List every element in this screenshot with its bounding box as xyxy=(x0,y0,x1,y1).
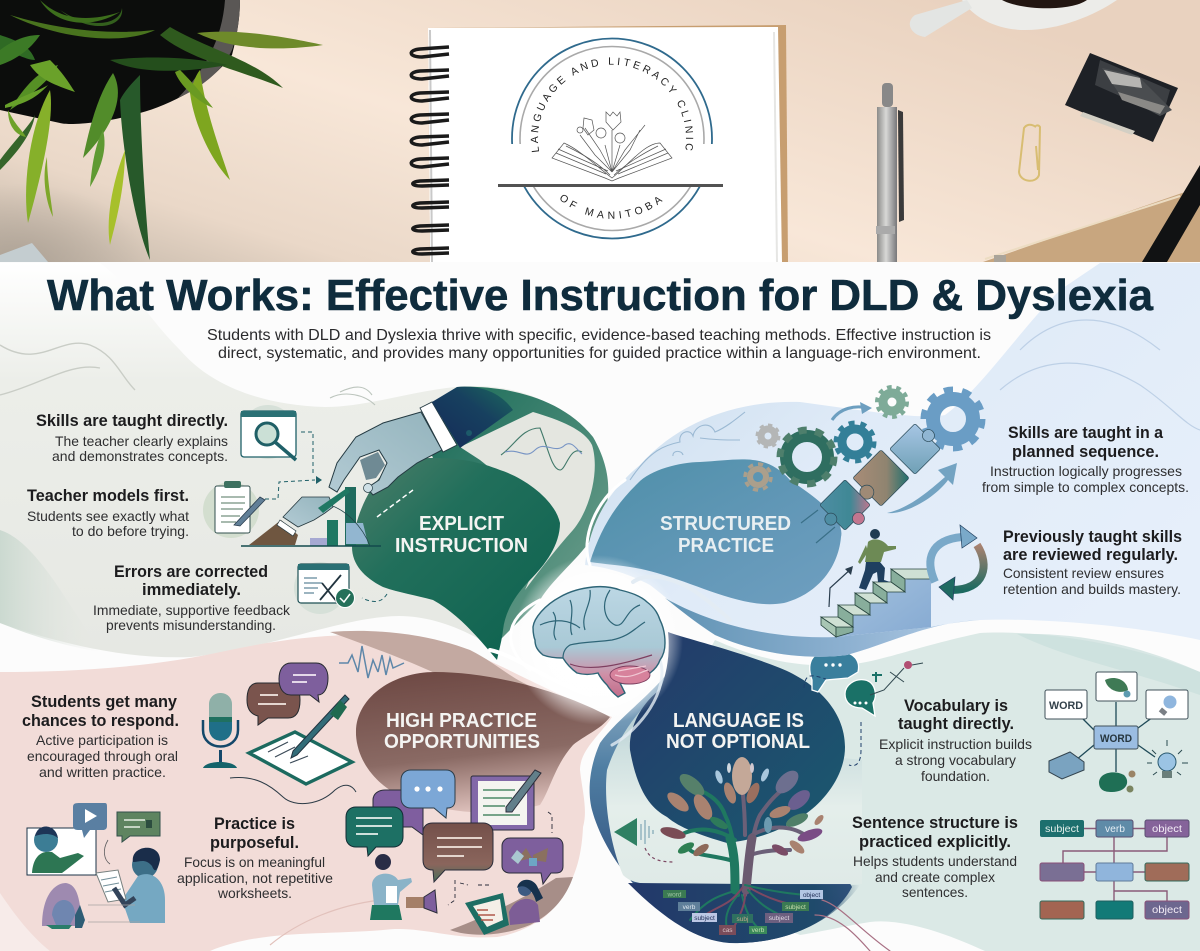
text: skills are taught directly: Skills are taught directly. xyxy=(36,411,228,430)
heading: language is not optional: NOT OPTIONAL xyxy=(666,731,810,753)
panel: structured practice xyxy=(585,263,1200,657)
chart: sentence diagram: subject xyxy=(1045,824,1079,835)
labels: word roots: verb xyxy=(683,904,696,911)
intro paragraph xyxy=(207,327,991,362)
icon: folder corner xyxy=(983,190,1200,262)
panel: explicit instruction xyxy=(0,263,608,660)
text: sentence structure: Sentence structure is xyxy=(852,813,1018,832)
text: students get many chances: encouraged through oral xyxy=(27,748,178,764)
text: vocabulary is taught directly xyxy=(879,696,1032,784)
text: previously taught skills: Consistent review ensures xyxy=(1003,565,1164,581)
labels: word roots: object xyxy=(803,892,820,899)
notebook xyxy=(411,25,788,262)
text: students get many chances: and written practice. xyxy=(39,764,166,780)
text: sentence structure: and create complex xyxy=(875,869,995,885)
icon: coffee mug xyxy=(910,0,1117,37)
text: teacher models first: Students see exactly what xyxy=(27,508,189,524)
illustration: speech bubbles and teacher xyxy=(346,770,563,935)
intro paragraph: Students with DLD and Dyslexia thrive with specific, evidence-based teaching methods. Effective instruction is xyxy=(207,327,991,344)
text: skills taught in a planned sequence: planned sequence. xyxy=(1012,442,1159,461)
text: vocabulary is taught directly: foundation. xyxy=(921,768,990,784)
labels: word roots: subject xyxy=(769,915,789,922)
text: skills are taught directly: and demonstrates concepts. xyxy=(52,448,228,464)
text: vocabulary is taught directly: Vocabulary is xyxy=(904,696,1008,715)
chart: sentence diagram: object xyxy=(1152,824,1182,835)
icon: microphone xyxy=(203,693,238,768)
text: previously taught skills xyxy=(1003,527,1182,597)
photo header: desk scene xyxy=(0,0,1200,262)
title: What Works: Effective Instruction for DLD & Dyslexia xyxy=(47,271,1154,320)
icon: word map: WORD xyxy=(1100,733,1132,745)
labels: word roots: subj xyxy=(737,916,748,923)
text: students get many chances: Active participation is xyxy=(36,732,168,748)
text: students get many chances: chances to respond. xyxy=(22,711,179,730)
text: practice is purposeful xyxy=(177,814,333,901)
heading: language is not optional xyxy=(666,710,810,753)
intro paragraph: direct, systematic, and provides many opportunities for guided practice within a language-rich environment. xyxy=(218,345,981,362)
text: teacher models first: Teacher models first. xyxy=(27,486,189,505)
heading: structured practice: STRUCTURED xyxy=(660,513,791,535)
icon: speaker xyxy=(614,818,675,862)
text: vocabulary is taught directly: a strong vocabulary xyxy=(895,752,1016,768)
text: previously taught skills: retention and builds mastery. xyxy=(1003,581,1181,597)
icon: paperclip xyxy=(1019,125,1040,181)
labels: word roots: subject xyxy=(694,915,715,922)
text: vocabulary is taught directly: Explicit instruction builds xyxy=(879,736,1032,752)
logo: Language and Literacy Clinic of Manitoba xyxy=(498,38,723,240)
icon: error correction window xyxy=(294,562,387,614)
labels: word roots xyxy=(663,890,823,935)
icon: magnifier window xyxy=(241,405,313,475)
text: teacher models first xyxy=(27,486,189,539)
chart: sentence diagram: object xyxy=(1152,905,1182,916)
notebook corner xyxy=(0,243,48,262)
heading: high practice opportunities: HIGH PRACTICE xyxy=(386,710,537,732)
text: previously taught skills: are reviewed regularly. xyxy=(1003,545,1178,564)
text: skills taught in a planned sequence: Skills are taught in a xyxy=(1008,423,1164,442)
illustration: tree with word roots xyxy=(659,757,890,951)
text: errors are corrected immediately: Immediate, supportive feedback xyxy=(93,602,291,618)
text: errors are corrected immediately: Errors are corrected xyxy=(114,562,268,581)
text: skills taught in a planned sequence xyxy=(982,423,1189,495)
text: errors are corrected immediately: immediately. xyxy=(142,580,241,599)
text: errors are corrected immediately: prevents misunderstanding. xyxy=(106,617,276,633)
icon: black pen xyxy=(1142,165,1200,262)
spiral binding xyxy=(411,47,449,254)
text: vocabulary is taught directly: taught directly. xyxy=(898,714,1014,733)
icon: review cycle arrows xyxy=(930,525,984,600)
icon: word map: WORD xyxy=(1049,700,1083,712)
icon: sound wave xyxy=(339,646,404,678)
heading: structured practice: PRACTICE xyxy=(678,535,774,557)
icon: gears xyxy=(745,387,982,490)
text: students get many chances: Students get many xyxy=(31,692,178,711)
icon: potted plant xyxy=(0,0,323,260)
icon: chat bubbles xyxy=(804,650,923,766)
icon: brain xyxy=(533,587,665,697)
heading: explicit instruction xyxy=(395,513,528,557)
illustration: hands teaching xyxy=(241,387,513,546)
heading: high practice opportunities xyxy=(384,710,540,753)
heading: high practice opportunities: OPPORTUNITIES xyxy=(384,731,540,753)
text: skills are taught directly: The teacher clearly explains xyxy=(55,433,228,449)
icon: binder clip xyxy=(1065,53,1178,142)
chart: sentence diagram: verb xyxy=(1105,824,1125,835)
heading: structured practice xyxy=(660,513,791,557)
text: practice is purposeful: application, not repetitive xyxy=(177,870,333,886)
text: sentence structure: sentences. xyxy=(902,884,968,900)
icon: speech bubbles and notepad xyxy=(230,663,356,804)
text: previously taught skills: Previously taught skills xyxy=(1003,527,1182,546)
labels: word roots: subject xyxy=(785,904,806,911)
logo: Language and Literacy Clinic of Manitoba: OF MANITOBA xyxy=(560,194,662,219)
text: skills taught in a planned sequence: Instruction logically progresses xyxy=(990,463,1182,479)
icon: word map xyxy=(1045,672,1188,792)
text: skills taught in a planned sequence: from simple to complex concepts. xyxy=(982,479,1189,495)
heading: explicit instruction: INSTRUCTION xyxy=(395,535,528,557)
panel: language is not optional xyxy=(590,632,1200,951)
icon: cloud line xyxy=(630,412,745,480)
text: practice is purposeful: Practice is xyxy=(214,814,295,833)
labels: word roots: word xyxy=(666,892,682,898)
central glow and swooshes xyxy=(490,480,730,745)
text: skills are taught directly xyxy=(36,411,228,464)
labels: word roots: verb xyxy=(752,927,765,934)
chart: sentence diagram xyxy=(1040,820,1189,919)
icon: puzzle pieces xyxy=(814,419,945,541)
heading: explicit instruction: EXPLICIT xyxy=(419,513,504,535)
text: practice is purposeful: Focus is on meaningful xyxy=(184,854,325,870)
heading: language is not optional: LANGUAGE IS xyxy=(673,710,804,732)
text: teacher models first: to do before trying. xyxy=(72,523,189,539)
text: sentence structure: practiced explicitly. xyxy=(859,832,1011,851)
text: practice is purposeful: worksheets. xyxy=(217,885,292,901)
text: sentence structure xyxy=(852,813,1018,900)
labels: word roots: cas xyxy=(722,927,733,934)
icon: open book with flowers xyxy=(552,112,672,181)
icon: wave lines xyxy=(330,387,582,470)
text: students get many chances xyxy=(22,692,179,780)
icon: person on stairs xyxy=(821,529,931,637)
text: practice is purposeful: purposeful. xyxy=(210,833,299,852)
icon: pen silver xyxy=(876,83,904,262)
icon: clipboard with pencil xyxy=(203,476,322,538)
panel: high practice opportunities xyxy=(0,631,612,951)
text: errors are corrected immediately xyxy=(93,562,291,633)
logo: Language and Literacy Clinic of Manitoba: LANGUAGE AND LITERACY CLINIC xyxy=(530,57,694,152)
illustration: students and video xyxy=(27,803,165,929)
text: sentence structure: Helps students understand xyxy=(853,853,1017,869)
arrow: progress xyxy=(801,402,957,543)
